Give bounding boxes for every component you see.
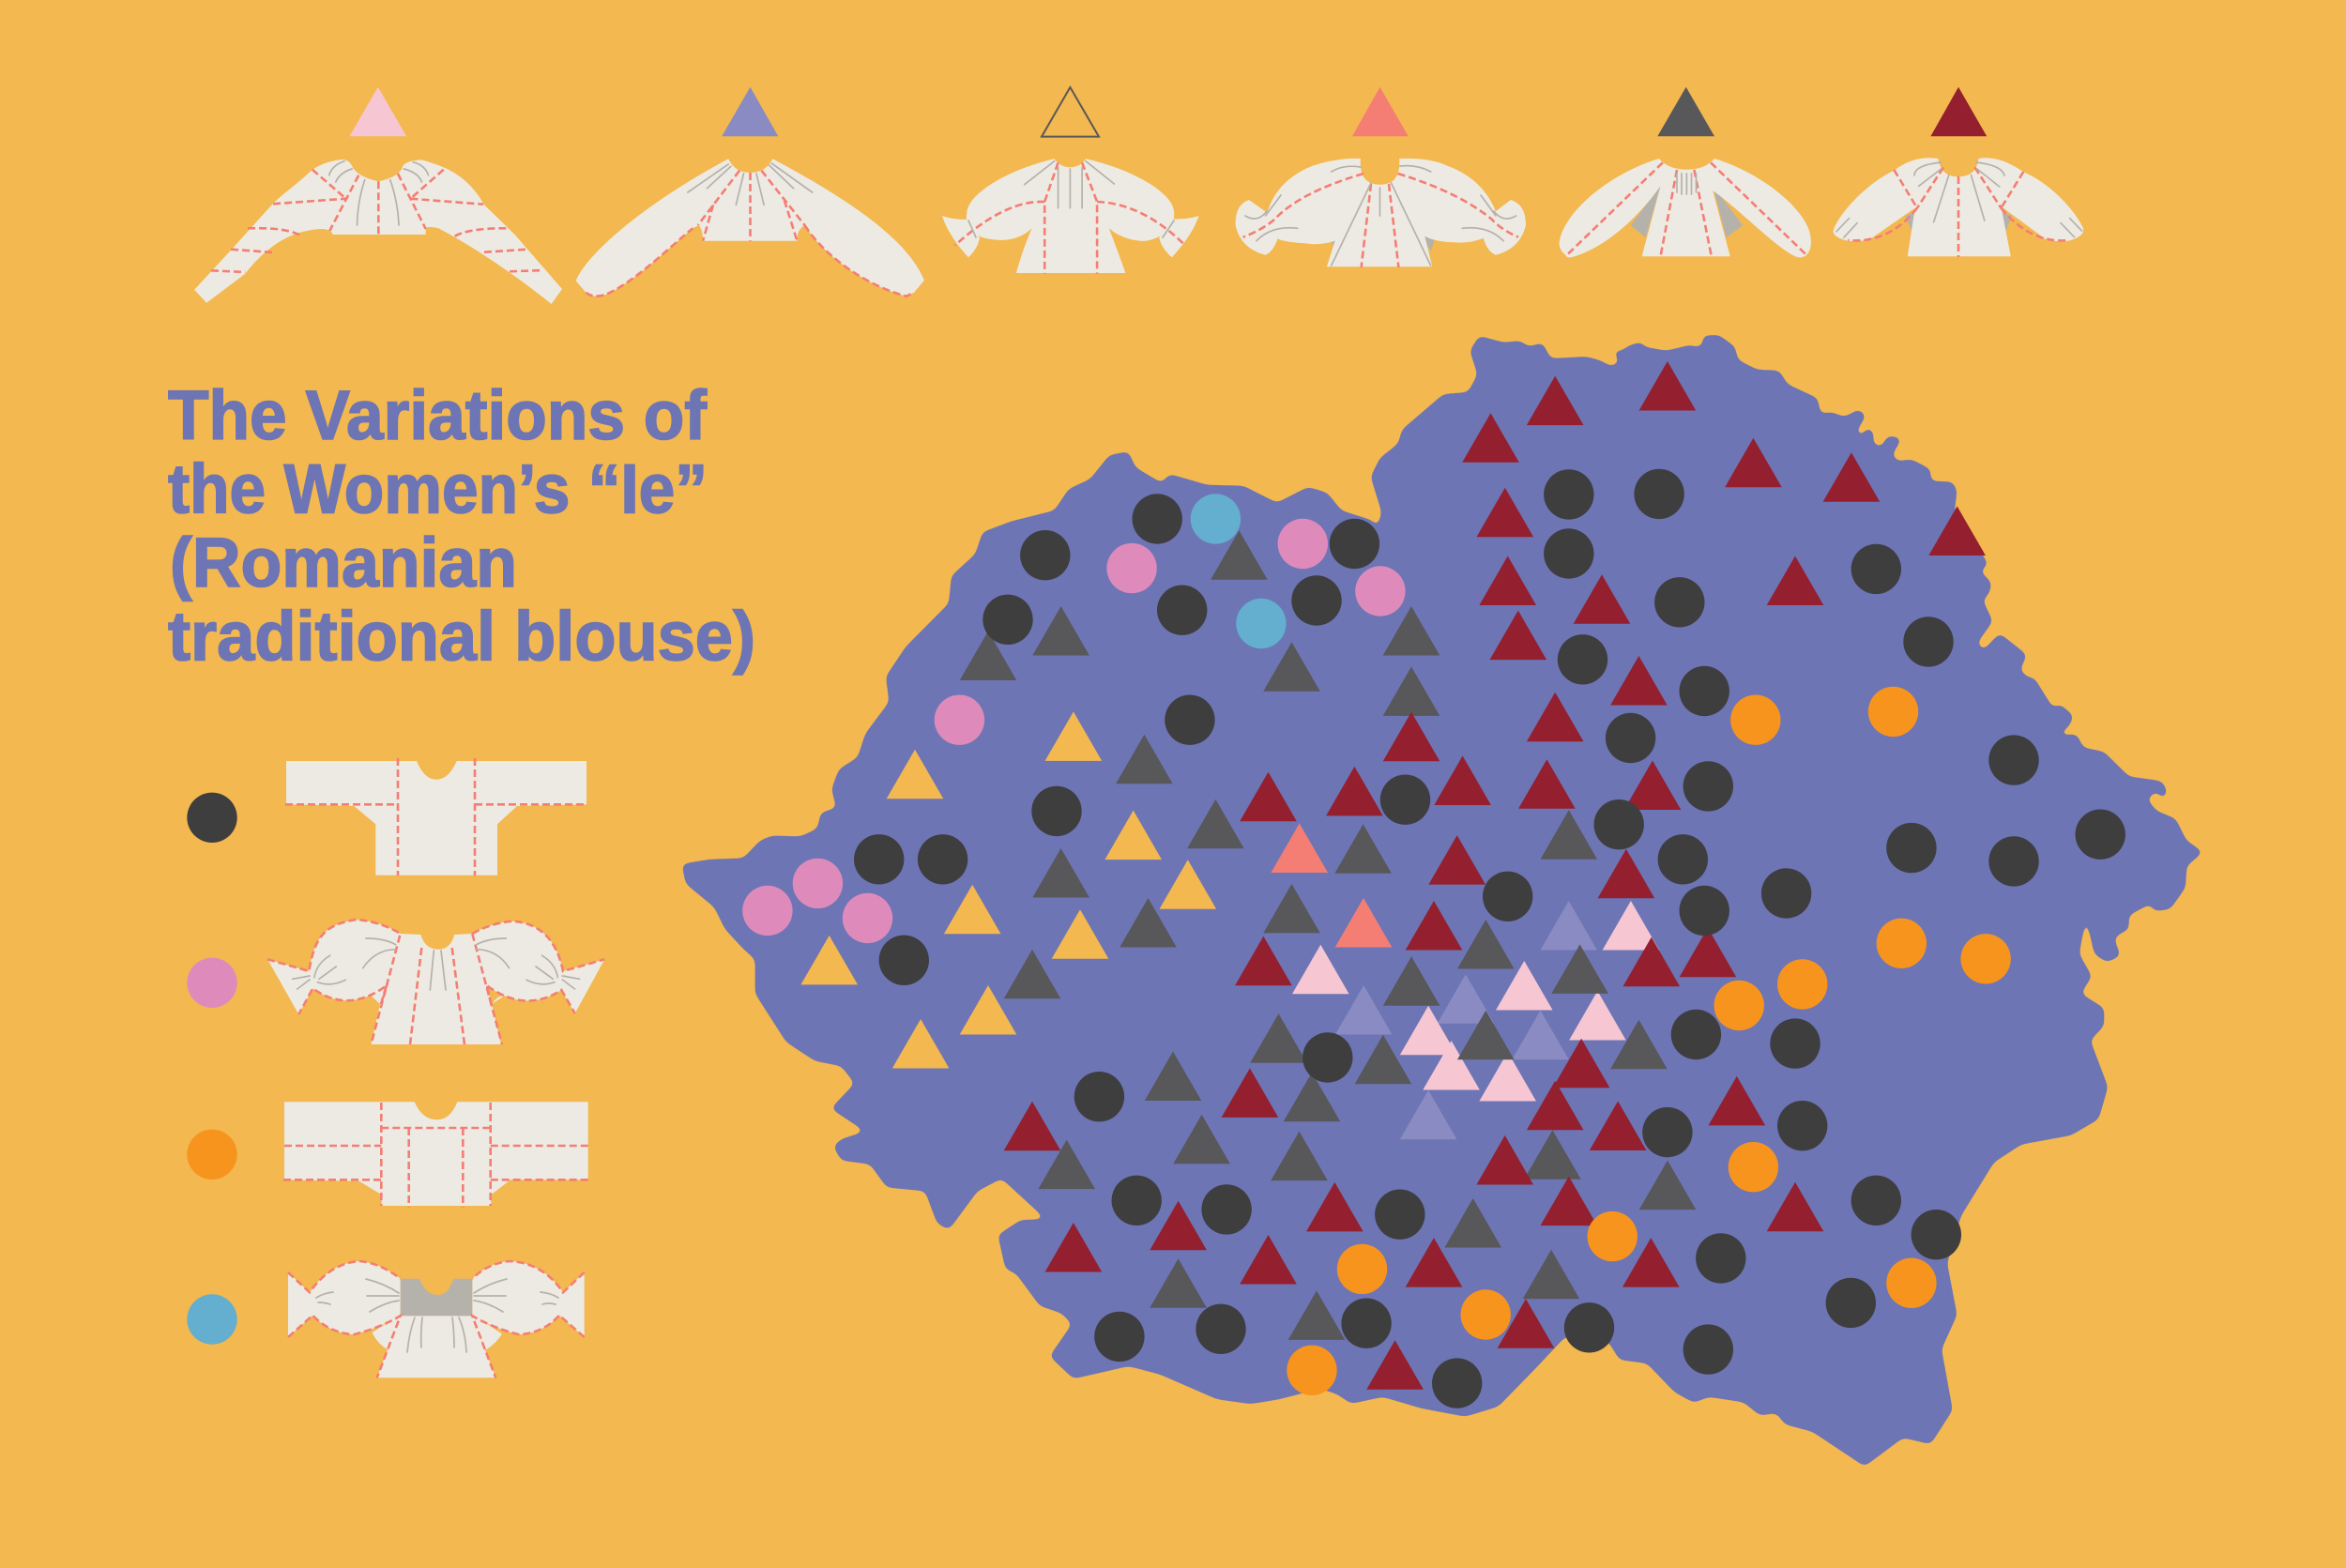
triangle key: dark gray	[1657, 87, 1714, 136]
blouse 3: outlined triangle type	[942, 159, 1199, 274]
legend blouse: bow sleeves with gray yoke	[288, 1261, 585, 1378]
legend blouse: straight sleeves	[285, 758, 587, 875]
triangles: dark red	[1004, 361, 1986, 1390]
triangle key: dark red	[1930, 87, 1987, 136]
blouse 6: dark red triangle type	[1834, 158, 2083, 257]
legend blouse: puffed sleeves with flared cuffs	[267, 920, 604, 1044]
triangles: salmon	[1271, 824, 1392, 948]
triangles: light purple	[1335, 901, 1597, 1139]
triangle key: light purple	[722, 87, 778, 136]
triangle key: outlined	[1042, 87, 1099, 137]
legend: circle blouse types	[187, 758, 604, 1378]
blouse 5: dark gray triangle type	[1560, 159, 1811, 257]
blouse 4: salmon triangle type	[1236, 159, 1526, 267]
map of Romania	[681, 335, 2203, 1467]
triangle: dark gray above red	[1038, 1140, 1095, 1189]
blouse 1: pink triangle type	[194, 160, 562, 304]
title: The Variations of	[168, 376, 707, 454]
legend blouse: panelled straight sleeves	[283, 1102, 589, 1208]
map markers	[742, 361, 2125, 1408]
top row: blouse variations keyed to triangles	[194, 87, 2083, 304]
circles: blue	[1191, 494, 1287, 648]
title: the Women’s “Ie”	[168, 450, 708, 528]
legend dot: orange	[187, 1130, 237, 1180]
circles: orange	[1287, 687, 2011, 1395]
legend dot: blue	[187, 1294, 237, 1345]
triangles: yellow	[800, 711, 1216, 1068]
circles: dark	[854, 469, 2125, 1408]
legend dot: pink	[187, 958, 237, 1008]
circles: pink	[742, 519, 1406, 943]
triangle key: pink	[349, 87, 406, 136]
title: traditional blouse)	[168, 597, 755, 675]
triangles: pink	[1292, 901, 1659, 1102]
blouse 2: light purple triangle type	[576, 159, 924, 297]
title	[168, 376, 755, 675]
title: (Romanian	[170, 524, 517, 601]
legend dot: dark	[187, 793, 237, 843]
triangles: dark gray	[960, 530, 1696, 1340]
triangle key: salmon	[1352, 87, 1409, 136]
